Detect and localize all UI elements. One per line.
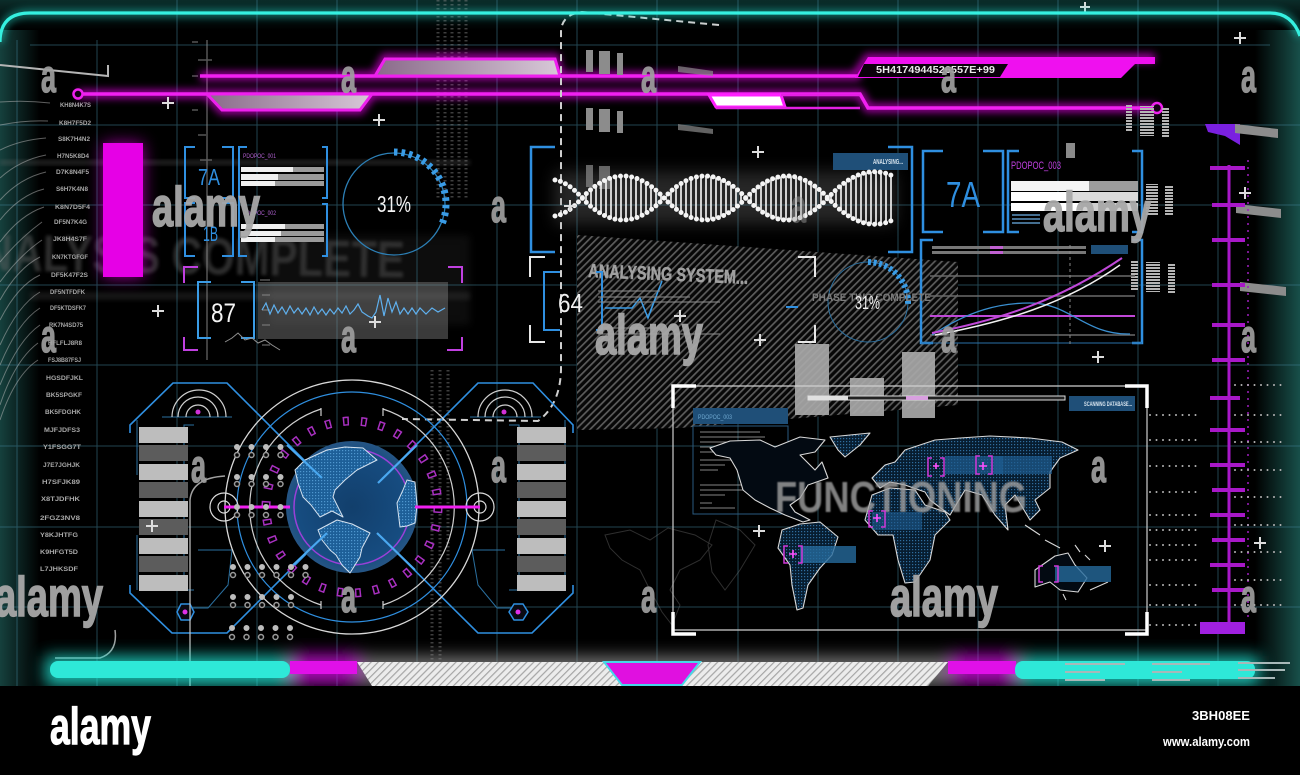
list labels: J7E7JGHJK [43,463,81,469]
list labels: BK5SPGKF [46,393,82,399]
list labels: HGSDFJKL [46,376,83,382]
watermark letters: a [641,50,656,102]
white curve and stem [55,476,225,686]
7A value: 7A [946,174,980,215]
central bright tab [709,95,785,107]
south america [778,522,838,610]
right node [1152,103,1162,113]
upper line [200,74,860,78]
dot matrix [232,447,310,637]
panel: scanning world map [673,386,1147,634]
list labels: K8H7F5D2 [59,121,92,127]
semicircle gauges [172,390,532,417]
left panel stack [139,427,188,591]
progress bar [808,396,1065,400]
analysing label: ANALYSING... [873,159,903,166]
magenta glyph ring [266,421,438,593]
glow [555,172,895,224]
list labels: Y8KJHTFG [40,533,78,539]
list labels: DF5KTDSFK7 [50,306,87,312]
watermark letters: a [341,50,356,102]
white corners [530,257,815,342]
watermark logos [0,175,1151,628]
hatched center [357,662,948,686]
bell curve [932,303,1130,335]
africa [865,488,950,583]
tag: PDOPOC_003 [1011,160,1061,172]
scanning label: SCANNING DATABASE... [1084,401,1132,408]
list labels: KH8N4K7S [60,103,91,109]
glow [78,58,1157,110]
crosses [146,2,1266,552]
frame [921,240,1142,343]
7A label: 7A [198,164,221,190]
bars group A [241,167,324,186]
inner gauge [828,262,908,342]
watermark logos: alamy [152,175,260,238]
tags: PDOPOC_001 [243,154,277,160]
australia [1035,553,1087,592]
brackets [185,147,327,256]
blue diagonals [287,445,417,570]
blue bracket [544,272,602,330]
list labels: DF5N7K4G [54,220,87,226]
bracket left [531,147,555,252]
watermark letters: a [341,310,356,362]
scan frame corners [673,386,1147,634]
watermark logos: alamy [890,565,998,628]
magenta corners [184,267,462,350]
watermark logos: alamy [1043,180,1151,243]
panel: analysing system [530,257,931,342]
location tags [784,456,1111,582]
magenta center [604,662,700,685]
panel: DNA helix [531,147,912,252]
barcodes [1066,104,1175,293]
top glyph [1205,124,1240,145]
watermark letters: a [1241,570,1256,622]
right tab readout [858,64,1008,77]
list labels: DF5NTFDFK [50,290,86,296]
cyan left [50,661,290,678]
watermark letters: a [941,310,956,362]
grey rules right [1065,663,1290,680]
header bars [932,245,1128,254]
central tab outline [716,95,860,108]
eurasia [872,436,1078,530]
list labels: BK5FDGHK [45,410,82,416]
globe [286,441,418,573]
heading: ANALYSING SYSTEM... [588,261,749,289]
bottom status strip [45,654,1290,686]
watermark letters: a [1241,310,1256,362]
magenta vertical block [103,143,143,277]
list labels: MJFJDFS3 [44,428,81,434]
vertical axis with ticks [192,40,270,360]
analysing label [833,153,908,170]
side hub circles [210,493,494,521]
greenland [830,433,870,457]
north america [710,437,828,522]
chart lines [930,276,1135,335]
watermark letters: a [641,570,656,622]
watermark logos: alamy [595,303,703,366]
panel: magenta ladder [1200,124,1286,628]
upper grey tab [375,59,560,76]
list labels: H7SFJK89 [42,480,81,486]
panel: globe radar [130,380,573,637]
list labels: KN7KTGFGF [52,255,88,261]
watermark letters: a [341,570,356,622]
magenta left [290,661,357,674]
list labels: 2FGZ3NV8 [40,516,81,522]
watermark letters: a [191,440,206,492]
dotted data columns [432,0,466,660]
list labels: RK7N4SD75 [49,323,84,329]
scan frame lines [673,386,1147,630]
list labels: L7JHKSDF [40,567,78,573]
watermark letters: a [41,50,56,102]
top magenta bars [74,57,1162,113]
helix rungs [582,172,895,224]
inner value: 31% [855,293,880,313]
value 64: 64 [558,288,583,318]
fine print [1012,215,1040,223]
list labels: JK8H4S7F [53,237,87,243]
bars group B [241,224,324,242]
data log panel [693,408,788,514]
list labels: DF5K47F2S [51,273,88,279]
value: 87 [211,298,236,328]
list labels: K9HFGT5D [40,550,79,556]
brackets [923,151,1142,232]
ladder glow [1226,165,1232,625]
right tab readout: 5H4174944526557E+99 [876,65,995,76]
islands [1025,525,1108,600]
lower line [82,94,1157,108]
panel: line chart [921,240,1142,345]
ladder ticks [1210,168,1245,590]
ecg [605,281,662,318]
grey wave panel [258,282,448,339]
list labels [40,103,92,573]
list labels: HFLFLJ8R8 [48,341,83,347]
website: www.alamy.com [1162,734,1250,749]
panel: 7A readout right [923,151,1142,232]
list labels: H7N5K8D4 [57,154,90,160]
gauge: 31 percent [342,152,446,256]
tags [243,154,277,217]
alamy logo: alamy [50,698,151,756]
hex nodes [177,604,528,620]
list labels: Y1FSGG7T [43,445,81,451]
top left angled line [0,65,108,76]
grey column bars [795,344,935,418]
functioning ghost label: FUNCTIONING [775,473,1027,522]
right panel stack [517,427,566,591]
watermark letters: a [1091,440,1106,492]
bar glyph groups [586,50,713,189]
blue bracket [198,282,254,338]
list labels: S6H7K4N8 [56,187,89,193]
watermark letters: a [491,180,506,232]
cyan right [1015,661,1255,679]
right magenta tab [855,57,1155,78]
ghost dash [786,306,798,308]
glow [45,654,1260,686]
1B label: 1B [203,223,218,246]
watermark letters: a [791,180,806,232]
ghost panels [0,160,470,325]
waveform [262,295,445,318]
list labels: FSJ8B87FSJ [48,358,81,364]
rising curves [932,258,1122,333]
watermark letters: a [941,50,956,102]
bars [1011,181,1138,211]
cyan top frame [0,13,1300,42]
scanning label [1069,396,1135,411]
left node [74,90,82,98]
inner frame lines [137,417,565,608]
phase label: PHASE TWO COMPLETE [812,292,931,304]
list labels: D7K8N4F5 [56,170,90,176]
image id: 3BH08EE [1192,708,1250,723]
list labels: X8TJDFHK [41,497,81,503]
watermark letters [41,50,1256,622]
left data list [0,101,92,573]
hatched analysis panel [577,235,958,430]
ghost world map [605,520,755,625]
continents [710,433,1108,610]
helix strands [555,176,895,224]
grey tags [1235,124,1286,296]
dotted rows [1150,385,1285,625]
data log panel: PDOPOC_003 [698,415,733,421]
footer banner [0,686,1300,775]
watermark letters: a [491,440,506,492]
watermark letters: a [1241,50,1256,102]
magenta right [948,661,1016,674]
small sparkline [225,333,280,350]
spine [1228,165,1230,625]
list labels: S8K7H4N2 [58,137,91,143]
bracket right [888,147,912,252]
watermark letters: a [41,310,56,362]
panel: 7A 1B bar readouts [185,147,327,256]
globe continents [295,447,417,573]
side panel frames [130,383,573,633]
bottom glyph [1200,622,1245,634]
panel: 87 waveform [184,267,462,350]
outer rings [225,380,479,634]
dashed connector line [402,12,719,421]
tags: PDOPOC_002 [243,211,277,217]
text rules [598,291,720,334]
magenta crosshair [224,506,480,508]
lower grey tab [207,94,372,110]
list curves [0,101,50,420]
list labels: K8N7D5F4 [55,205,91,211]
gauge: 31 percent: 31% [377,191,411,217]
